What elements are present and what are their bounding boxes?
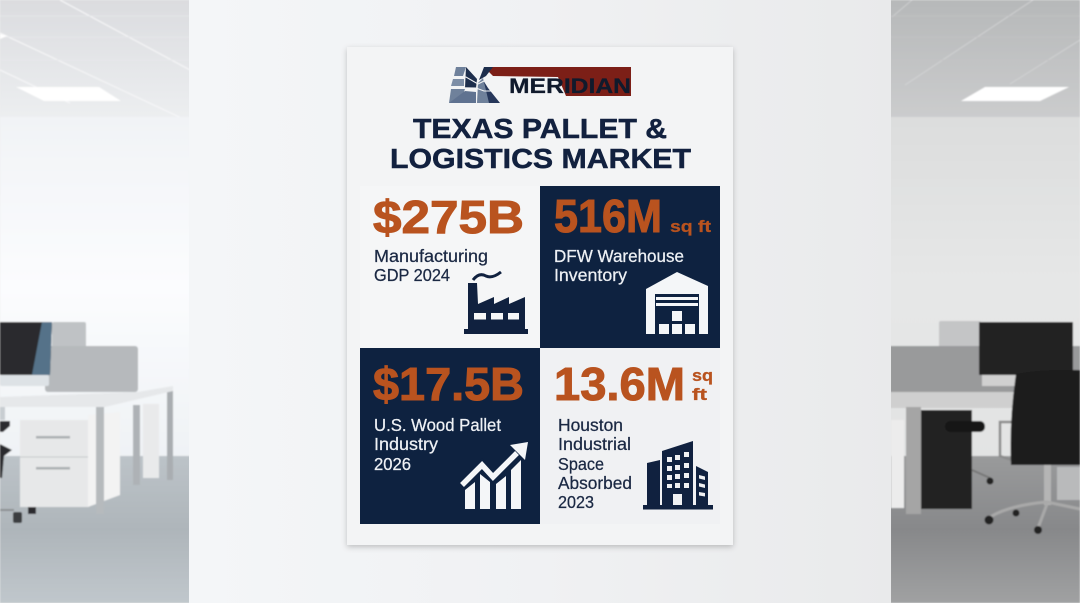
title: TEXAS PALLET & (413, 113, 667, 144)
panel: DFW warehouse: Inventory (554, 265, 627, 285)
panel: U.S. wood pallet: 2026 (374, 454, 411, 474)
panel: DFW warehouse: DFW Warehouse (554, 246, 684, 266)
panel: Houston industrial: 2023 (558, 492, 594, 512)
panel: manufacturing GDP (360, 186, 540, 348)
logo: Meridian: MERIDIAN (509, 74, 631, 98)
office background, right side (890, 0, 1080, 603)
panel: U.S. wood pallet: $17.5B (373, 358, 524, 410)
poster (347, 47, 733, 545)
panel: Houston industrial: 13.6M (554, 358, 685, 410)
panel: Houston industrial: ft (692, 385, 707, 404)
icon: office building (643, 441, 713, 510)
title: LOGISTICS MARKET (390, 143, 691, 174)
title (390, 113, 691, 174)
panel: DFW warehouse: 516M (554, 190, 662, 242)
panel: manufacturing GDP: $275B (373, 191, 524, 243)
panel: DFW warehouse (540, 186, 720, 348)
panel: Houston industrial: Space (558, 454, 604, 474)
panel: Houston industrial: Houston (558, 415, 623, 435)
panel: U.S. wood pallet: U.S. Wood Pallet (374, 415, 501, 435)
office background, left side (0, 0, 190, 603)
icon: factory (464, 272, 528, 334)
panel: manufacturing GDP: GDP 2024 (374, 265, 450, 285)
icon: warehouse (646, 272, 708, 334)
panel: Houston industrial: sq (692, 366, 713, 385)
panel: manufacturing GDP: Manufacturing (374, 246, 488, 266)
panel: Houston industrial (540, 348, 720, 524)
panel: Houston industrial: Absorbed (558, 473, 632, 493)
panel: U.S. wood pallet (360, 348, 540, 524)
logo: Meridian (449, 67, 631, 103)
icon: growth chart (462, 442, 528, 509)
panel: Houston industrial: Industrial (558, 434, 631, 454)
panel: DFW warehouse: sq ft (670, 217, 711, 236)
central wall (189, 0, 891, 603)
panel: U.S. wood pallet: Industry (374, 434, 438, 454)
